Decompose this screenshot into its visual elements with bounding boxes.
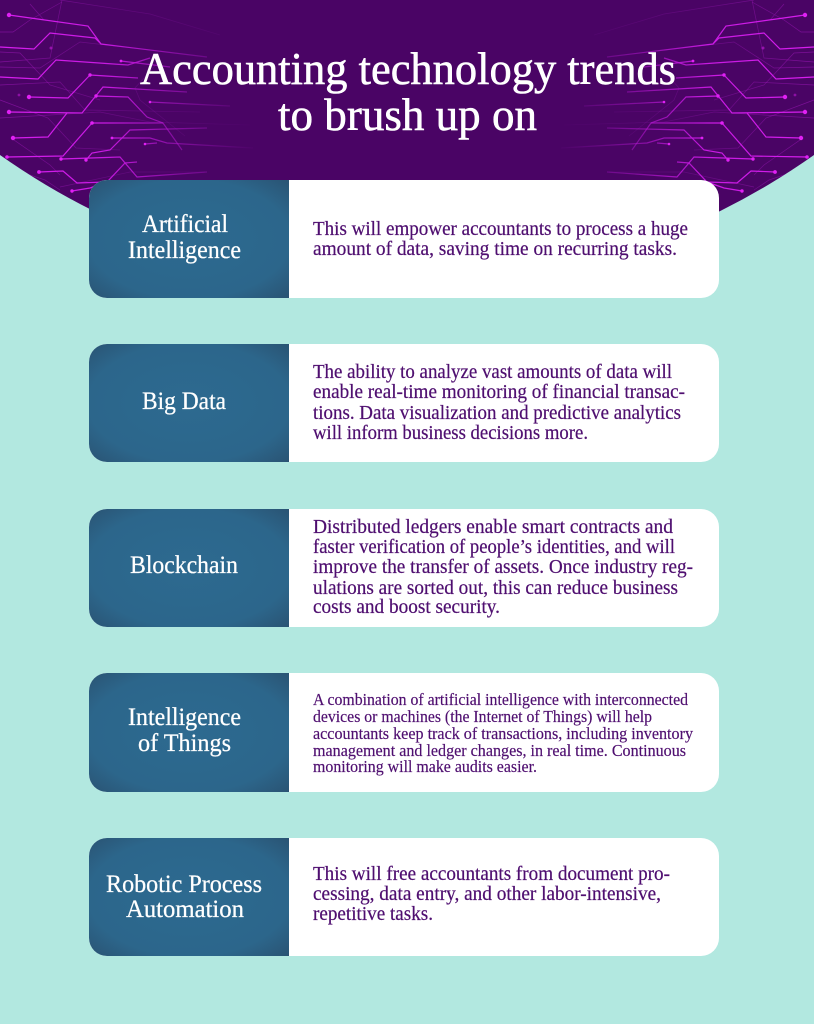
heading: Robotic Process Automation — [106, 871, 262, 923]
heading: Big Data: Big Data — [142, 388, 226, 415]
text: Blockchain description: costs and boost security. — [313, 597, 500, 618]
title — [140, 43, 676, 140]
header: purple arc with circuit pattern — [0, 0, 814, 212]
heading: Artificial Intelligence: Intelligence — [128, 237, 241, 264]
text: Robotic Process Automation description: This will free accountants from document pro- — [313, 864, 670, 885]
heading: Artificial Intelligence — [128, 211, 241, 264]
heading: Intelligence of Things: Intelligence — [128, 704, 241, 731]
label panel: Blockchain — [89, 509, 289, 627]
text: Blockchain description: ulations are sorted out, this can reduce business — [313, 578, 678, 599]
label panel: Artificial Intelligence — [89, 180, 289, 298]
heading: Intelligence of Things — [128, 704, 241, 757]
text: Blockchain description: faster verification of people’s identities, and will — [313, 537, 676, 558]
label panel: Robotic Process Automation — [89, 838, 289, 956]
text: Blockchain description: improve the transfer of assets. Once industry reg- — [313, 557, 693, 578]
text: Blockchain description — [313, 517, 693, 618]
text: Robotic Process Automation description — [313, 864, 670, 925]
text: Intelligence of Things description — [313, 690, 694, 776]
text: Robotic Process Automation description: repetitive tasks. — [313, 904, 433, 925]
text: Big Data description: will inform business decisions more. — [313, 423, 588, 444]
text: Robotic Process Automation description: cessing, data entry, and other labor-intensive, — [313, 884, 661, 905]
panel: Big Data — [89, 344, 719, 462]
heading: Robotic Process Automation: Robotic Process — [106, 871, 262, 898]
text: Intelligence of Things description: monitoring will make audits easier. — [313, 757, 537, 776]
text: Blockchain description: Distributed ledgers enable smart contracts and — [313, 517, 673, 538]
text: Big Data description: The ability to analyze vast amounts of data will — [313, 362, 673, 383]
text: Big Data description — [313, 362, 685, 444]
panel: Intelligence of Things — [89, 673, 719, 792]
text: Artificial Intelligence description: This will empower accountants to process a huge — [313, 219, 688, 240]
text: Intelligence of Things description: accountants keep track of transactions, including inventory — [313, 724, 694, 743]
heading: Artificial Intelligence: Artificial — [142, 211, 228, 238]
heading: Blockchain: Blockchain — [130, 552, 238, 579]
text: Big Data description: tions. Data visualization and predictive analytics — [313, 403, 681, 424]
title: to brush up on — [278, 89, 537, 140]
heading: Robotic Process Automation: Automation — [126, 896, 244, 923]
panel: Artificial Intelligence — [89, 180, 719, 298]
text: Intelligence of Things description: management and ledger changes, in real time. Continuous — [313, 741, 686, 760]
text: Artificial Intelligence description: amount of data, saving time on recurring tasks. — [313, 239, 677, 260]
panel: Robotic Process Automation — [89, 838, 719, 956]
text: Intelligence of Things description: devices or machines (the Internet of Things) will help — [313, 707, 652, 726]
text: Intelligence of Things description: A combination of artificial intelligence with interconnected — [313, 690, 689, 709]
text: Big Data description: enable real-time monitoring of financial transac- — [313, 382, 685, 403]
label panel: Big Data — [89, 344, 289, 462]
panel: Blockchain — [89, 509, 719, 627]
title: Accounting technology trends — [140, 43, 676, 94]
text: Artificial Intelligence description — [313, 219, 688, 260]
heading: Intelligence of Things: of Things — [138, 730, 231, 757]
label panel: Intelligence of Things — [89, 673, 289, 792]
